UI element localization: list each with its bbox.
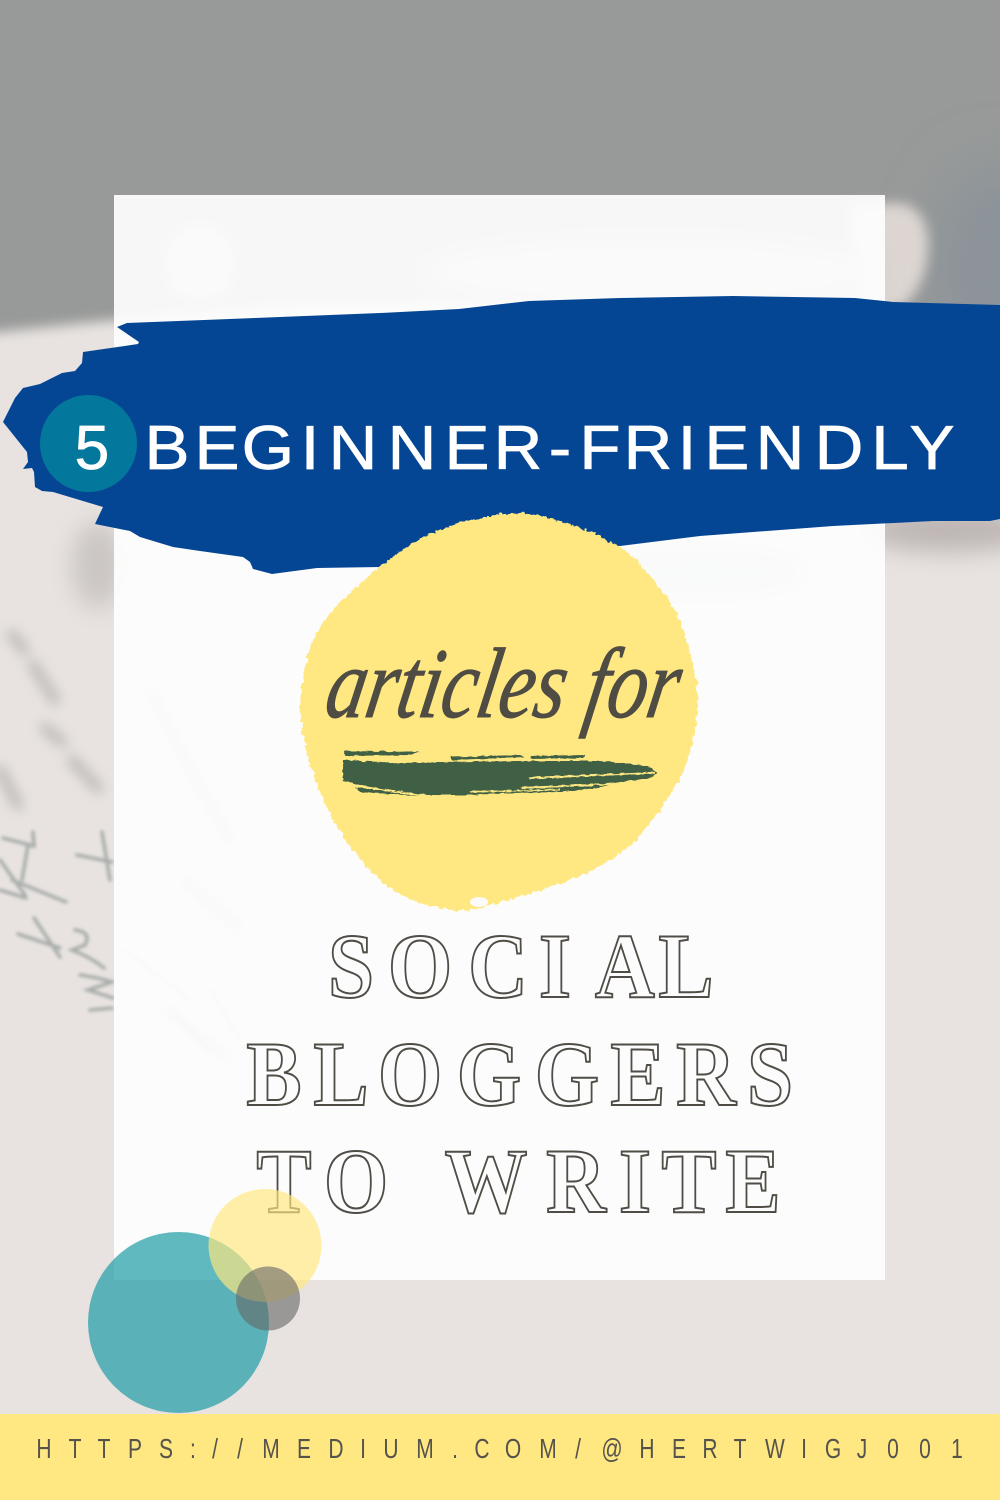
- script text: articles for: articles for: [319, 628, 691, 739]
- yellow rough circle: [300, 513, 698, 911]
- panel: translucent white card: [114, 195, 885, 1280]
- badge circle: number 5: 5: [75, 414, 109, 483]
- footer url text: HTTPS://MEDIUM.COM/@HERTWIGJ001: [36, 1434, 963, 1465]
- heading: social bloggers to write: [246, 915, 793, 1232]
- badge circle: number 5: [40, 395, 137, 492]
- heading: beginner-friendly: BEGINNER-FRIENDLY: [144, 412, 955, 482]
- decorative overlapping circles: [88, 1189, 322, 1413]
- line: social: SOCIAL: [328, 915, 714, 1017]
- line: to write: TOWRITE: [256, 1130, 781, 1232]
- brush stroke banner: navy: [3, 296, 1000, 574]
- footer bar: [0, 1414, 1000, 1500]
- green brush underline: [343, 751, 657, 796]
- line: bloggers: BLOGGERS: [246, 1023, 793, 1125]
